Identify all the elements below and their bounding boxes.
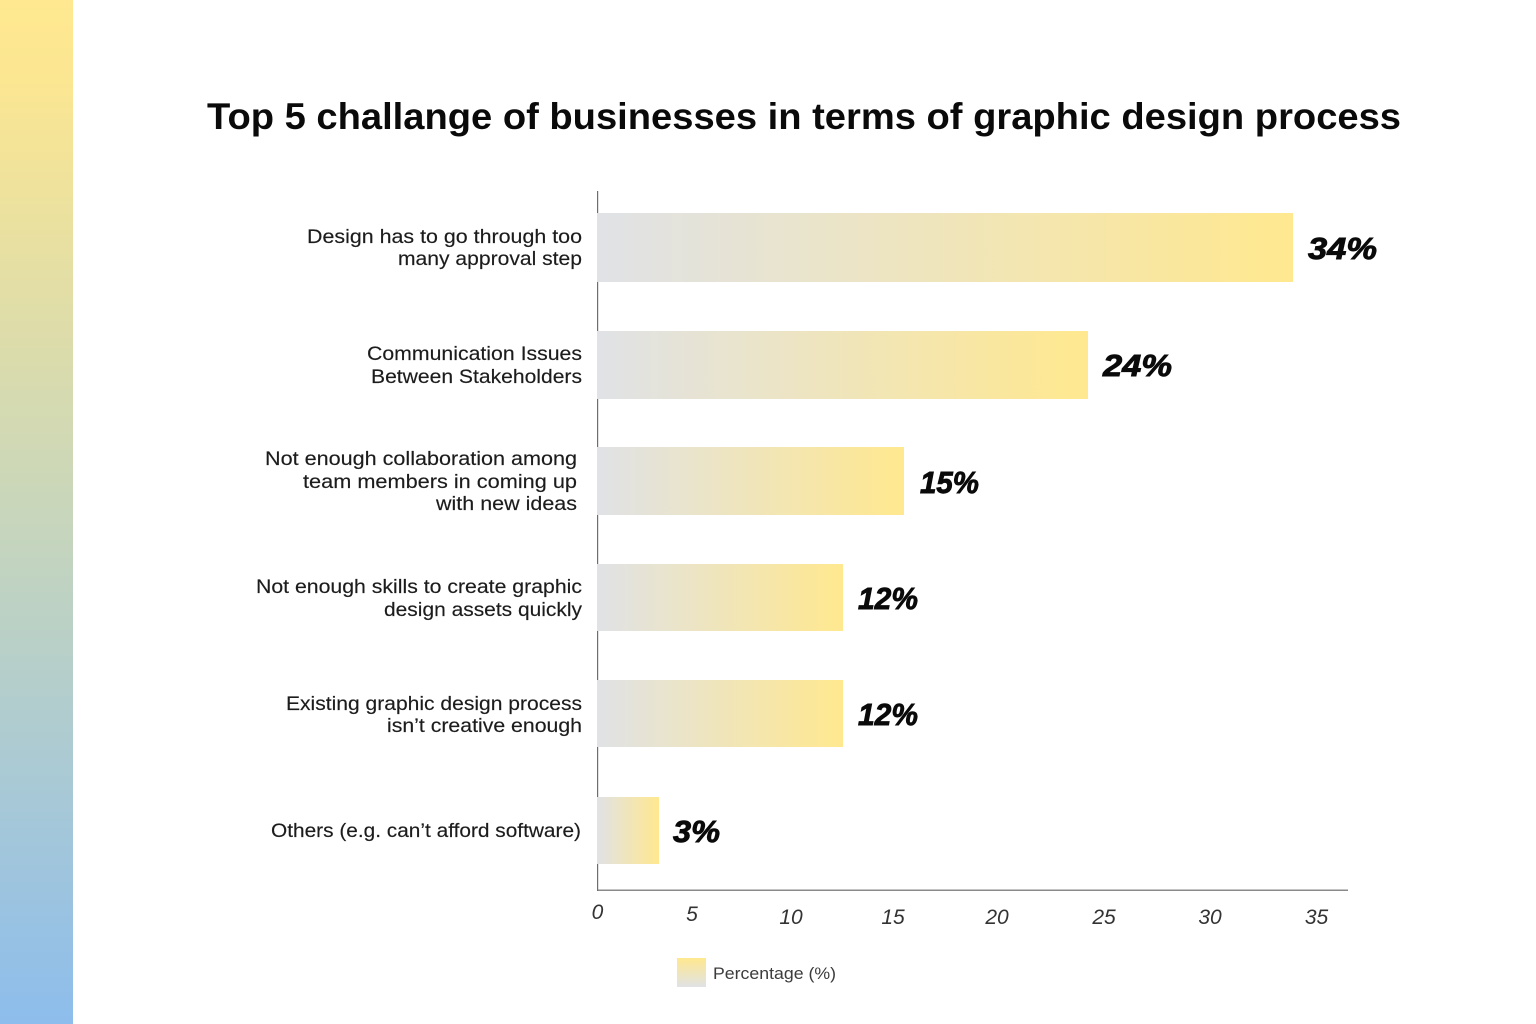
bar row: communication issues: [367, 331, 1172, 399]
label: collaboration: with new ideas: [435, 493, 577, 515]
bar row: design approval steps: [307, 213, 1377, 282]
label: communication: [367, 343, 582, 388]
x-axis tick labels: 10: [779, 906, 803, 929]
x-axis tick labels: 35: [1305, 906, 1328, 929]
bar: 24%: [597, 331, 1088, 399]
legend label: Percentage (%): [713, 964, 836, 983]
value: 15%: 15%: [920, 465, 979, 500]
bar: 3%: [597, 797, 659, 864]
value: 12% process: 12%: [858, 697, 918, 732]
label: collaboration: [265, 448, 577, 515]
x-axis tick labels: 30: [1198, 906, 1222, 929]
legend swatch: [677, 958, 706, 987]
label: collaboration: team members in coming up: [303, 471, 577, 493]
label: skills: Not enough skills to create graphic: [256, 576, 582, 598]
label: skills: design assets quickly: [384, 599, 582, 621]
label: design approval: Design has to go through too: [307, 226, 582, 248]
bar row: collaboration: [265, 447, 979, 515]
label: design approval: many approval step: [398, 248, 582, 270]
bar row: others: [271, 797, 720, 864]
x-axis tick labels: 15: [881, 906, 905, 929]
bar row: existing process: [286, 680, 918, 747]
bar row: skills: [256, 564, 918, 631]
legend: [677, 958, 836, 987]
label: collaboration: Not enough collaboration among: [265, 448, 577, 470]
value: 12% skills: 12%: [858, 581, 918, 616]
label: others: Others (e.g. can’t afford software): [271, 820, 581, 842]
value: 24%: 24%: [1102, 348, 1172, 383]
label: communication: Communication Issues: [367, 343, 582, 365]
label: existing process: Existing graphic design process: [286, 693, 582, 715]
bar: 34%: [597, 213, 1293, 282]
bar: 12% skills: [597, 564, 843, 631]
value: 34%: 34%: [1308, 231, 1377, 266]
axes: [597, 191, 1348, 891]
value: 3%: 3%: [673, 814, 720, 849]
x-axis tick labels: 20: [984, 906, 1009, 929]
title: Top 5 challange of businesses in terms of graphic design process: [207, 96, 1401, 137]
label: communication: Between Stakeholders: [371, 366, 582, 388]
label: existing process: [286, 693, 582, 737]
left gradient band: [0, 0, 73, 1024]
x-axis tick labels: 25: [1091, 906, 1116, 929]
x-axis tick labels: [592, 901, 1328, 929]
label: skills: [256, 576, 582, 621]
bar: 15%: [597, 447, 904, 515]
x-axis tick labels: 5: [686, 903, 698, 926]
x-axis tick labels: 0: [592, 901, 604, 924]
bar: 12% process: [597, 680, 843, 747]
label: design approval: [307, 226, 582, 270]
label: existing process: isn’t creative enough: [387, 715, 582, 737]
